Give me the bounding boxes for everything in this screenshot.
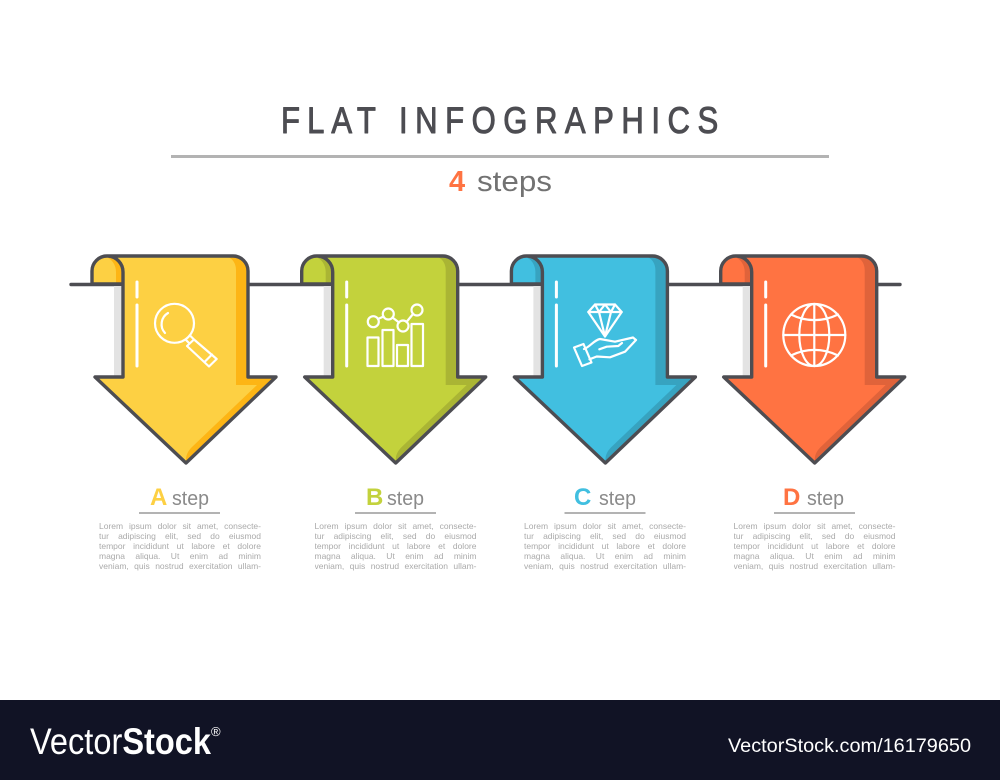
panel: step D arrow [721,256,905,463]
arrow shade [396,256,486,463]
body copy A: magna aliqua. Ut enim ad minim [99,551,261,561]
heading underline A [139,512,220,514]
tab shade [106,257,123,283]
body copy C: tur adipiscing elit, sed do eiusmod [524,531,686,541]
panel: step C arrow [511,256,695,463]
folded tab [302,256,333,284]
white accent bar [764,282,767,366]
body copy C: tempor incididunt ut labore et dolore [524,541,686,551]
step label B: step [387,488,424,510]
registered mark: ® [211,724,221,739]
folded tab [721,256,752,284]
white accent bar [555,282,558,366]
arrow shade [815,256,905,463]
panel: step B arrow [302,256,486,463]
arrow shade [186,256,276,463]
icon: diamond over hand [574,304,636,366]
body copy D: veniam, quis nostrud exercitation ullam- [734,561,896,571]
body copy A: Lorem ipsum dolor sit amet, consecte- [99,521,261,531]
subtitle: 4 [449,166,465,198]
step heading A: A [150,484,167,511]
arrow body [305,256,486,463]
body copy C: veniam, quis nostrud exercitation ullam- [524,561,686,571]
tab shade [525,257,542,283]
arrow body [95,256,276,463]
arrow outline [302,256,486,463]
heading underline C [564,512,646,514]
body copy B [314,521,478,573]
folded tab [92,256,123,284]
body copy D: tempor incididunt ut labore et dolore [734,541,896,551]
step heading D: D [783,484,800,511]
body copy B: tempor incididunt ut labore et dolore [314,541,476,551]
side shadow [743,286,752,376]
step heading C: C [574,484,591,511]
arrow outline [511,256,695,463]
body copy D: magna aliqua. Ut enim ad minim [734,551,896,561]
body copy B: magna aliqua. Ut enim ad minim [314,551,476,561]
icon: globe [783,304,845,366]
hanging line [71,283,900,286]
arrow body [514,256,695,463]
arrow outline [721,256,905,463]
text block: step C [524,484,687,573]
body copy D: Lorem ipsum dolor sit amet, consecte- [734,521,896,531]
heading underline D [774,512,855,514]
body copy C: Lorem ipsum dolor sit amet, consecte- [524,521,686,531]
step label C: step [599,488,636,510]
body copy B: veniam, quis nostrud exercitation ullam- [314,561,476,571]
step heading B: B [366,484,383,511]
footer image id: VectorStock.com/16179650 [728,736,971,757]
footer logo: VectorStock [30,721,211,762]
body copy A: tempor incididunt ut labore et dolore [99,541,261,551]
tab shade [735,257,752,283]
body copy B: Lorem ipsum dolor sit amet, consecte- [314,521,476,531]
panel: step A arrow [92,256,276,463]
arrow body [724,256,905,463]
step label A: step [172,488,209,510]
icon: bar chart with trend line [368,304,423,366]
body copy C: magna aliqua. Ut enim ad minim [524,551,686,561]
icon: magnifier [155,304,217,366]
title rule [171,155,829,158]
white accent bar [136,282,138,366]
side shadow [114,286,123,376]
body copy A [99,521,262,573]
text block: step B [314,484,478,573]
side shadow [324,286,333,376]
subtitle: steps [477,166,552,198]
body copy A: veniam, quis nostrud exercitation ullam- [99,561,261,571]
step label D: step [807,488,844,510]
text block: step D [734,484,896,573]
arrow outline [92,256,276,463]
tab shade [316,257,333,283]
body copy D [734,521,896,573]
arrow shade [605,256,695,463]
footer band [0,700,1000,780]
text block: step A [99,484,262,573]
body copy B: tur adipiscing elit, sed do eiusmod [314,531,476,541]
folded tab [511,256,542,284]
title: FLAT [281,101,376,142]
body copy C [524,521,687,573]
heading underline B [355,512,436,514]
side shadow [533,286,542,376]
body copy D: tur adipiscing elit, sed do eiusmod [734,531,896,541]
body copy A: tur adipiscing elit, sed do eiusmod [99,531,261,541]
white accent bar [345,282,348,366]
title: INFOGRAPHICS [399,101,718,142]
